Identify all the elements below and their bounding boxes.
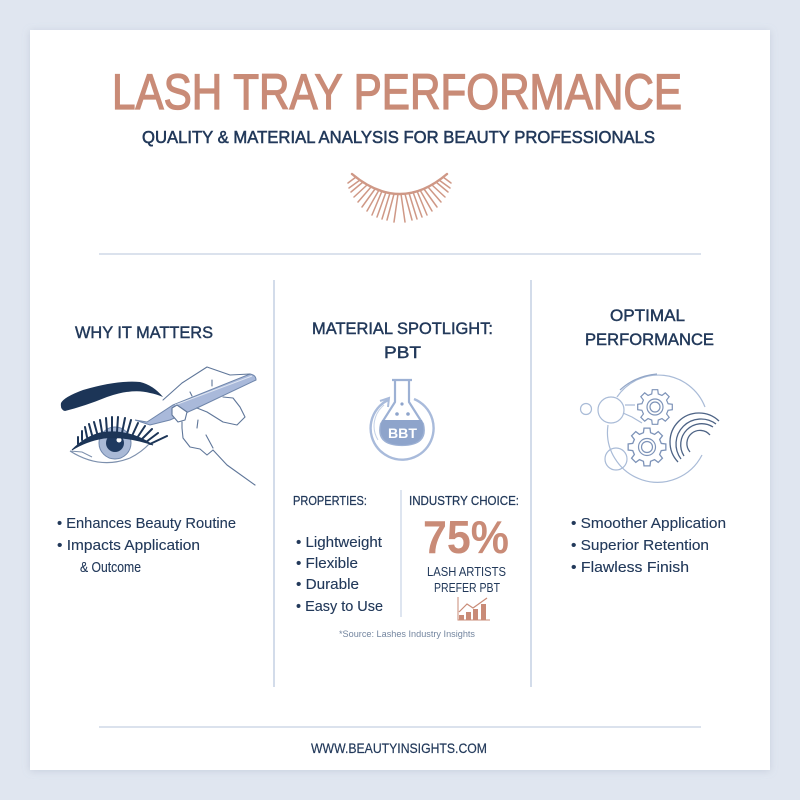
footer: WWW.BEAUTYINSIGHTS.COM [311,740,487,756]
industry choice heading: INDUSTRY CHOICE: [409,493,519,508]
divider top [99,253,701,255]
stat: 75%: 75% [423,511,509,563]
icon: flask: BBT [388,425,417,441]
heading: material spotlight [312,319,493,362]
icon: lash [348,174,451,222]
bullet list: • Smoother Application [571,516,726,532]
divider right [530,280,532,687]
heading: material spotlight: PBT [384,343,421,362]
stat caption: LASH ARTISTS [427,565,506,579]
stat caption: PREFER PBT [434,581,500,595]
title: LASH TRAY PERFORMANCE [112,64,682,120]
heading: optimal performance: PERFORMANCE [585,330,714,349]
bullet list [57,516,236,576]
bullet list: • Impacts Application [57,538,200,554]
bullet list [571,516,726,576]
properties list [296,535,383,615]
divider bottom [99,726,701,728]
bullet list: • Flawless Finish [571,560,689,576]
bullet list: & Outcome [80,560,141,576]
panel: optimal performance [571,306,726,576]
bullet list: • Superior Retention [571,538,709,554]
properties list: • Lightweight [296,535,382,551]
panel: material spotlight [293,319,519,640]
divider inner [400,490,402,617]
properties list: • Easy to Use [296,599,383,615]
properties heading: PROPERTIES: [293,493,367,508]
divider left [273,280,275,687]
properties list: • Flexible [296,556,358,572]
icon: flask [371,380,434,460]
icon: eye and tweezers [61,367,256,485]
source note: *Source: Lashes Industry Insights [339,629,475,640]
heading: why it matters: WHY IT MATTERS [75,323,213,342]
heading: optimal performance [585,306,714,349]
heading: material spotlight: MATERIAL SPOTLIGHT: [312,319,493,338]
icon: bar chart [458,597,490,620]
icon: gears and circles [580,374,719,482]
stat caption [427,565,506,595]
subtitle: QUALITY & MATERIAL ANALYSIS FOR BEAUTY PROFESSIONALS [142,127,655,147]
heading: optimal performance: OPTIMAL [610,306,685,325]
properties list: • Durable [296,577,359,593]
panel: why it matters [57,323,256,576]
bullet list: • Enhances Beauty Routine [57,516,236,532]
